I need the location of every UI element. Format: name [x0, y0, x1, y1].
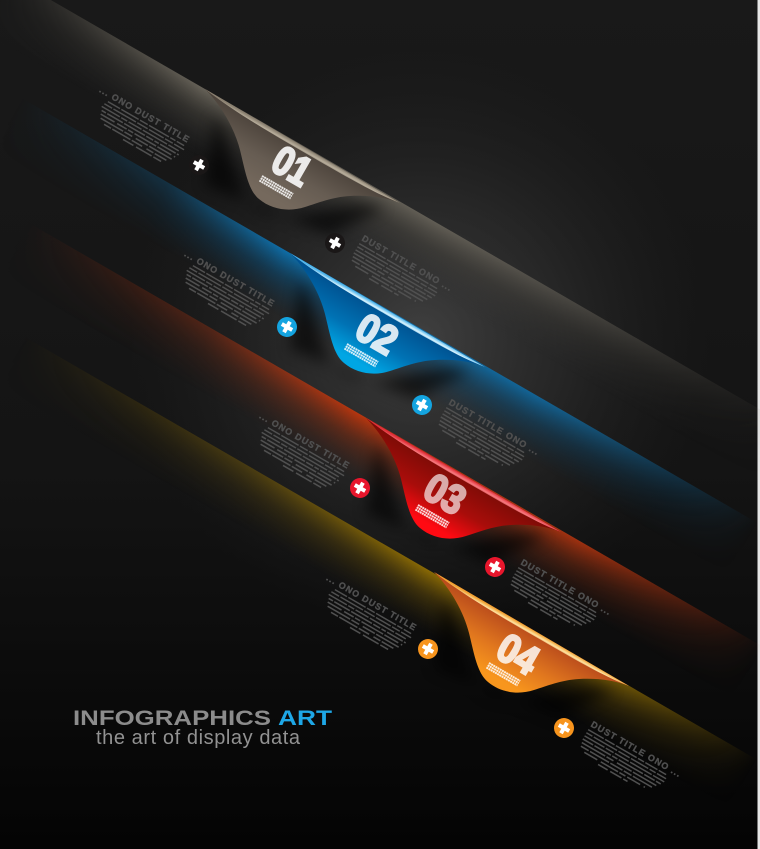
- number 02: 02: [348, 305, 405, 364]
- number 04: 04: [489, 625, 547, 685]
- text block: 02 left: [169, 249, 277, 332]
- text block: 04 right: [576, 719, 683, 803]
- text block: 03 right: [506, 557, 613, 641]
- text block: 03 left: ... ONO DUST TITLE: [258, 411, 352, 471]
- panel: step 03 curl: [366, 418, 561, 564]
- caption bars 02: [344, 344, 378, 367]
- icon: plus button 01 right: [321, 229, 349, 257]
- title accent: ART: [278, 707, 332, 730]
- band: 04 glow stripe: [67, 362, 744, 762]
- icon: plus button 03 right: [481, 553, 509, 581]
- panel: step 04 curl: [434, 572, 629, 718]
- number 03: 03: [416, 465, 473, 524]
- icon: plus button 03 left: [346, 474, 374, 502]
- subtitle: the art of display data: [96, 727, 301, 749]
- text block: 01 left: [84, 85, 192, 168]
- icon: plus button 04 right: [550, 714, 578, 742]
- text block: 01 right: DUST TITLE ONO ...: [360, 233, 454, 293]
- text block: 03 right: DUST TITLE ONO ...: [519, 557, 613, 617]
- text block: 01 left: ... ONO DUST TITLE: [98, 85, 192, 145]
- icon: plus button 02 left: [273, 313, 301, 341]
- text block: 03 left: [244, 411, 352, 494]
- number 01: 01: [264, 137, 320, 195]
- text block: 02 right: [434, 397, 541, 481]
- band: 03 glow stripe: [57, 240, 752, 652]
- band: 02 glow stripe: [52, 117, 740, 522]
- caption bars 01: [259, 176, 293, 199]
- icon: plus button 02 right: [408, 391, 436, 419]
- text block: 01 right: [347, 233, 454, 317]
- caption bars 03: [415, 505, 449, 528]
- caption bars 04: [486, 663, 520, 686]
- text block: 02 left: ... ONO DUST TITLE: [183, 249, 277, 309]
- band: 01 glow stripe: [32, 0, 760, 416]
- icon: plus button 01 left: [185, 151, 213, 179]
- panel: step 01 curl: [205, 89, 400, 235]
- text block: 04 left: [311, 573, 419, 656]
- icon: plus button 04 left: [414, 635, 442, 663]
- text block: 04 left: ... ONO DUST TITLE: [325, 573, 419, 633]
- panel: step 02 curl: [290, 253, 485, 399]
- text block: 02 right: DUST TITLE ONO ...: [447, 397, 541, 457]
- text block: 04 right: DUST TITLE ONO ...: [589, 719, 683, 779]
- title: INFOGRAPHICS: [73, 707, 271, 730]
